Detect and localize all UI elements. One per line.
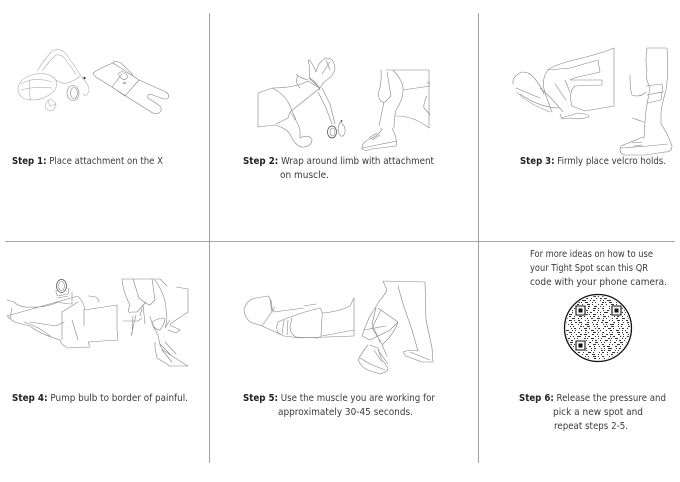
QR code badge — [560, 294, 632, 362]
step 5 caption: approximately 30-45 seconds. — [278, 407, 413, 418]
panel: step 1 illustration — [18, 50, 169, 114]
step 5 caption: Step 5: Use the muscle you are working for — [243, 393, 435, 404]
step 4 caption: Step 4: Pump bulb to border of painful. — [12, 393, 188, 404]
step 6 caption: Step 6: Release the pressure and — [519, 393, 666, 404]
QR intro text — [530, 249, 667, 288]
step 2 caption: on muscle. — [280, 170, 329, 181]
panel: step 4 illustration — [7, 279, 188, 366]
step 3 caption: Step 3: Firmly place velcro holds. — [520, 156, 666, 167]
QR intro text: code with your phone camera. — [530, 277, 667, 288]
QR intro text: your Tight Spot scan this QR — [530, 263, 648, 274]
step 1 caption: Step 1: Place attachment on the X — [12, 156, 164, 167]
step 2 caption: Step 2: Wrap around limb with attachment — [243, 156, 434, 167]
panel: step 2 illustration — [258, 58, 430, 150]
step 6 caption — [519, 393, 666, 432]
panel: step 3 illustration — [513, 48, 672, 155]
QR intro text: For more ideas on how to use — [530, 249, 653, 260]
step 6 caption: pick a new spot and — [553, 407, 643, 418]
panel: step 5 illustration — [244, 281, 433, 374]
step 2 caption — [243, 156, 434, 181]
step 6 caption: repeat steps 2-5. — [554, 421, 628, 432]
step 5 caption — [243, 393, 435, 418]
